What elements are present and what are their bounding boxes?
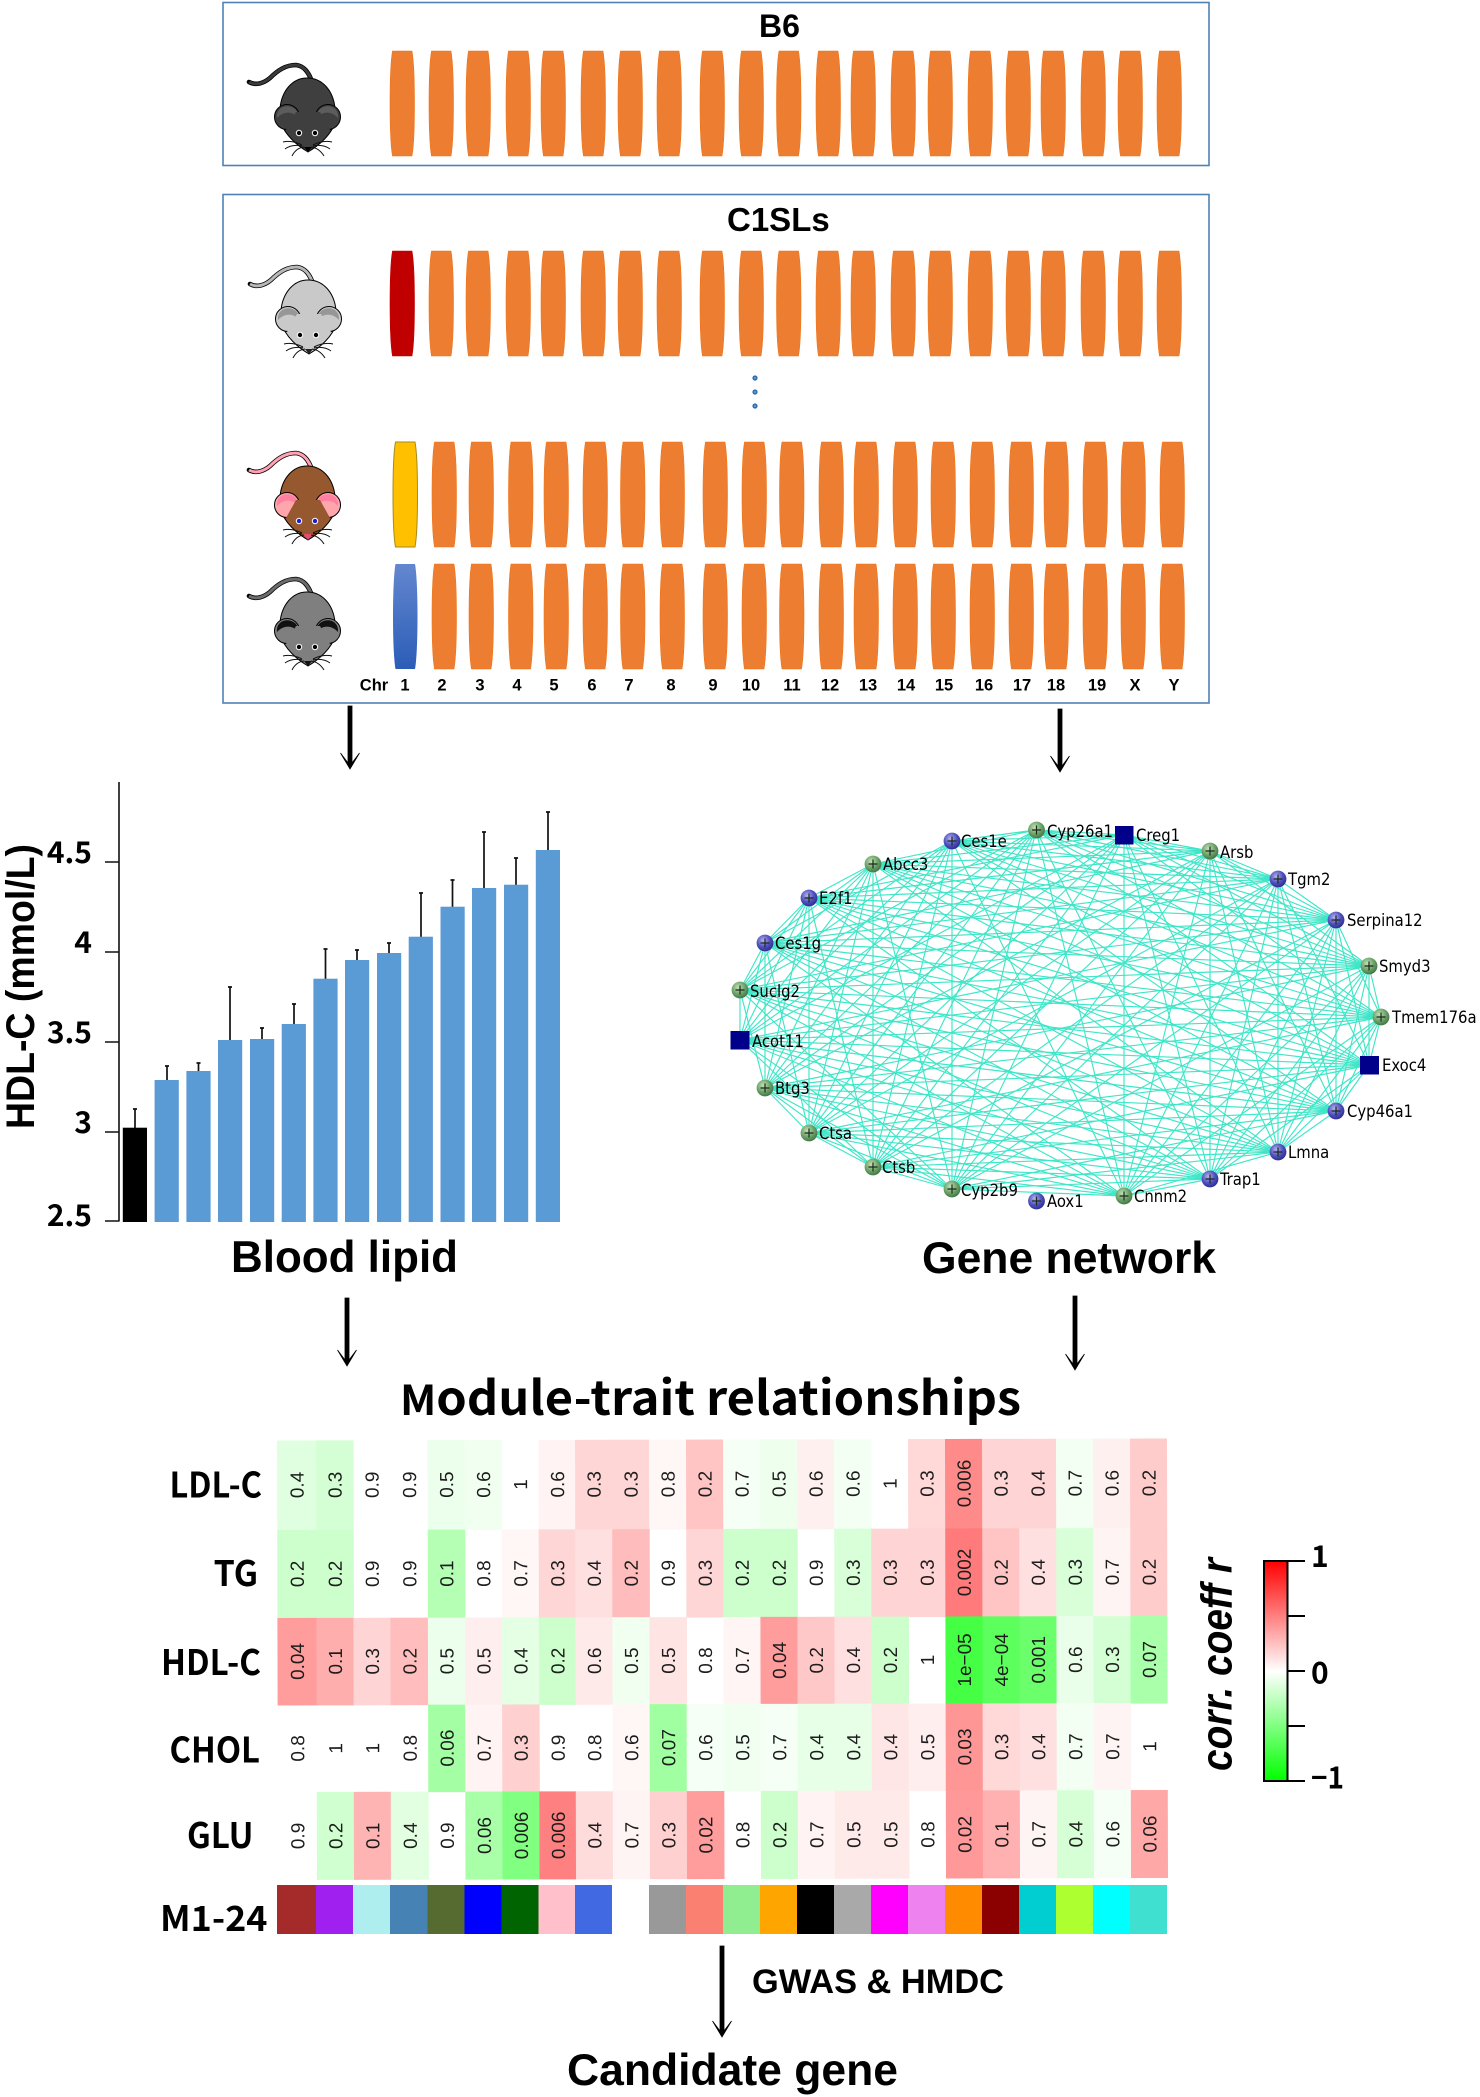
heat row: HDL-C: 0.5 xyxy=(659,1647,680,1674)
heat row: HDL-C: 0.2 xyxy=(548,1648,570,1674)
module colour bar M1-24 xyxy=(277,1885,1167,1934)
heat row: CHOL: 0.06 xyxy=(438,1730,459,1767)
heat row: TG: 0.3 xyxy=(1066,1559,1087,1585)
heat row: CHOL: 0.7 xyxy=(475,1735,496,1761)
heat row: HDL-C: 0.2 xyxy=(881,1647,902,1673)
heat row: GLU: 0.7 xyxy=(807,1822,828,1848)
heat row: TG: 0.9 xyxy=(363,1561,384,1587)
gene labels: Abcc3 xyxy=(883,855,928,874)
heat row: GLU: 0.7 xyxy=(622,1822,643,1848)
heat row: CHOL: 0.7 xyxy=(1066,1733,1087,1760)
heat row: CHOL: 0.3 xyxy=(512,1735,533,1761)
icon: brown mouse xyxy=(249,453,340,544)
heat row: GLU: 0.2 xyxy=(326,1823,347,1849)
chromosome number labels: 12 xyxy=(821,676,839,694)
heat row: GLU: 0.02 xyxy=(955,1816,976,1853)
gene labels: Lmna xyxy=(1288,1143,1329,1162)
heat row: HDL-C: 0.5 xyxy=(622,1647,643,1674)
chromosome number labels: 18 xyxy=(1047,676,1065,694)
heading: Gene network: Gene network xyxy=(922,1234,1216,1283)
chromosome number labels: 4 xyxy=(512,676,522,694)
chromosome number labels: 10 xyxy=(742,676,760,694)
heat row: TG: 0.002 xyxy=(955,1549,976,1596)
heat row: GLU: 0.3 xyxy=(659,1822,680,1848)
heatmap row labels xyxy=(160,1458,268,1942)
heat row: TG: 0.2 xyxy=(326,1561,347,1587)
heat row: TG: 0.9 xyxy=(659,1560,680,1586)
chromosome number labels: 19 xyxy=(1088,676,1106,694)
axis tick labels: 3.5 xyxy=(47,1008,92,1052)
heat row: LDL-C: 0.6 xyxy=(807,1471,828,1497)
heat row: HDL-C: 0.6 xyxy=(1066,1646,1087,1673)
heat row: GLU: 0.8 xyxy=(733,1822,754,1848)
gene labels: Ces1g xyxy=(775,934,821,953)
chromosome number labels: 16 xyxy=(975,676,993,694)
heat row: TG: 0.3 xyxy=(548,1560,569,1587)
heat row: LDL-C: 0.7 xyxy=(1066,1470,1087,1496)
chromosome number labels: 15 xyxy=(935,676,953,694)
heat row: LDL-C: 0.5 xyxy=(770,1471,791,1497)
colour legend: corr. coeff r xyxy=(1192,1532,1344,1798)
heat row: CHOL: 0.8 xyxy=(288,1735,309,1762)
heat row: GLU: 0.7 xyxy=(1029,1821,1050,1848)
chromosome number labels: 8 xyxy=(666,676,676,694)
arrow: genomes to blood lipid xyxy=(340,706,360,769)
heat row: TG: 0.2 xyxy=(733,1560,754,1586)
legend ticks xyxy=(1287,1561,1305,1781)
heat row: CHOL: 0.7 xyxy=(770,1734,791,1761)
heat row: HDL-C: 0.2 xyxy=(400,1648,422,1674)
icon: light grey mouse xyxy=(250,267,342,358)
heat row: TG: 0.7 xyxy=(1103,1559,1124,1585)
chromosome number labels xyxy=(360,676,1180,694)
heat row: HDL-C: 0.5 xyxy=(474,1648,496,1674)
heat row: HDL-C: 0.4 xyxy=(511,1647,533,1674)
heat row: GLU xyxy=(288,1790,1168,1880)
chromosome number labels: 13 xyxy=(859,676,877,694)
heat row: LDL-C: 0.6 xyxy=(548,1471,569,1498)
heading: Candidate gene: Candidate gene xyxy=(567,2046,898,2095)
heat row: TG: 0.9 xyxy=(400,1560,421,1587)
heat row: LDL-C: 1 xyxy=(881,1478,902,1489)
chromosome number labels: 1 xyxy=(400,676,410,694)
heat row: TG xyxy=(277,1528,1167,1618)
axis tick labels: 4.5 xyxy=(47,828,92,872)
network edges xyxy=(740,830,1381,1196)
heat row: GLU: 0.4 xyxy=(1066,1821,1087,1847)
chromosomes: yellow chr1 row xyxy=(393,442,1184,547)
heat row: GLU: 0.1 xyxy=(363,1823,384,1849)
heatmap row labels: HDL-C xyxy=(161,1635,261,1686)
legend title: corr. coeff r xyxy=(1192,1555,1242,1771)
heat row: CHOL: 1 xyxy=(1140,1741,1161,1752)
gene labels: Cyp26a1 xyxy=(1047,822,1113,841)
heading: Blood lipid: Blood lipid xyxy=(231,1233,458,1282)
gene labels: Acot11 xyxy=(752,1032,804,1051)
heat row: HDL-C: 1 xyxy=(918,1655,939,1665)
heat row: LDL-C xyxy=(277,1438,1167,1530)
heat row: GLU: 0.9 xyxy=(438,1822,459,1849)
gene labels: Tmem176a xyxy=(1391,1008,1477,1027)
heat row: CHOL: 0.4 xyxy=(881,1733,902,1760)
heat row: LDL-C: 0.3 xyxy=(585,1471,606,1498)
axis xyxy=(105,782,119,1222)
heat row: CHOL: 0.8 xyxy=(585,1735,606,1761)
axis tick labels: 4 xyxy=(74,918,92,962)
heat row: GLU: 0.5 xyxy=(881,1821,902,1848)
legend gradient bar xyxy=(1264,1561,1288,1781)
gene labels: Serpina12 xyxy=(1347,911,1423,930)
heat row: TG: 0.2 xyxy=(288,1561,309,1587)
heat row: GLU: 0.6 xyxy=(1103,1821,1124,1847)
chromosome number labels: 7 xyxy=(624,676,634,694)
heat row: LDL-C: 0.2 xyxy=(1140,1470,1161,1496)
chromosomes: red chr1 row xyxy=(390,251,1182,356)
heat row: GLU: 0.06 xyxy=(475,1817,496,1854)
heat row: TG: 0.2 xyxy=(622,1560,643,1586)
gene labels: Suclg2 xyxy=(750,982,800,1001)
chromosomes: blue chr1 row xyxy=(393,564,1184,669)
legend labels: 1 xyxy=(1311,1532,1329,1576)
gene labels: Ces1e xyxy=(961,832,1007,851)
heat row: TG: 0.2 xyxy=(992,1559,1013,1586)
heat row: CHOL: 0.03 xyxy=(955,1728,976,1765)
heatmap row labels: GLU xyxy=(187,1808,254,1859)
heat row: CHOL: 0.5 xyxy=(733,1734,754,1761)
heat row: HDL-C: 0.07 xyxy=(1140,1641,1161,1678)
gene labels: Btg3 xyxy=(775,1079,810,1098)
heat row: TG: 0.2 xyxy=(1140,1559,1161,1585)
chromosome number labels: 3 xyxy=(475,676,485,694)
chromosome number labels: Y xyxy=(1168,676,1180,694)
network: gene co-expression xyxy=(730,822,1477,1211)
heading: C1SLs: C1SLs xyxy=(727,201,830,238)
heat row: HDL-C: 4e−04 xyxy=(992,1633,1013,1687)
heat row: CHOL xyxy=(288,1703,1161,1792)
heat row: LDL-C: 0.6 xyxy=(844,1470,865,1497)
heat row: GLU: 0.5 xyxy=(844,1821,865,1848)
chromosome number labels: 6 xyxy=(587,676,597,694)
arrow: gene network to module traits xyxy=(1066,1296,1084,1370)
legend labels: −1 xyxy=(1311,1754,1344,1798)
axis title: HDL-C (mmol/L) xyxy=(0,844,43,1129)
heat row: CHOL: 0.8 xyxy=(401,1735,422,1761)
heat row: CHOL: 0.4 xyxy=(844,1734,865,1760)
heat row: TG: 0.4 xyxy=(1029,1559,1050,1586)
gene labels: Ctsb xyxy=(882,1158,915,1177)
legend labels xyxy=(1311,1532,1344,1798)
heat row: CHOL: 0.5 xyxy=(918,1734,939,1760)
heat row: LDL-C: 0.006 xyxy=(955,1460,976,1507)
heat row: LDL-C: 0.3 xyxy=(326,1472,347,1498)
heat row: GLU: 0.4 xyxy=(585,1822,606,1849)
heat row: HDL-C: 0.04 xyxy=(770,1641,791,1679)
heat row: LDL-C: 0.6 xyxy=(474,1471,495,1498)
chromosome number labels: 14 xyxy=(897,676,916,694)
heading: B6: B6 xyxy=(759,8,800,44)
heat row: CHOL: 0.07 xyxy=(659,1729,680,1766)
heat row: TG: 0.3 xyxy=(844,1559,865,1586)
heat row: HDL-C: 1e−05 xyxy=(955,1633,976,1687)
heat row: HDL-C: 0.7 xyxy=(733,1647,754,1674)
heat row: GLU: 0.1 xyxy=(992,1821,1013,1848)
heat row: TG: 0.3 xyxy=(696,1560,717,1586)
heat row: LDL-C: 1 xyxy=(511,1479,532,1490)
panel: B6 genome xyxy=(223,2,1209,166)
heat row: TG: 0.9 xyxy=(807,1560,828,1586)
panel: C1SLs genomes xyxy=(223,194,1209,703)
heat row: CHOL: 0.7 xyxy=(1103,1733,1124,1760)
heatmap row labels: M1-24 xyxy=(160,1891,268,1942)
heat row: GLU: 0.4 xyxy=(401,1822,422,1849)
heat row: LDL-C: 0.3 xyxy=(992,1470,1013,1497)
heat row: CHOL: 0.4 xyxy=(807,1734,828,1761)
heat row: LDL-C: 0.3 xyxy=(918,1470,939,1497)
heat row: HDL-C: 0.5 xyxy=(437,1648,459,1674)
chromosome number labels: 11 xyxy=(783,676,801,694)
gene labels: Cyp46a1 xyxy=(1347,1102,1413,1121)
chromosome number labels: 5 xyxy=(549,676,559,694)
gene labels: Ctsa xyxy=(819,1124,852,1143)
heat row: LDL-C: 0.4 xyxy=(1029,1470,1050,1497)
heat row: HDL-C: 0.2 xyxy=(807,1647,828,1674)
heat row: LDL-C: 0.4 xyxy=(288,1471,309,1498)
chromosome number labels: X xyxy=(1129,676,1141,694)
heat row: LDL-C: 0.9 xyxy=(400,1471,421,1498)
heat row: HDL-C: 0.04 xyxy=(288,1643,309,1680)
gene labels: Cyp2b9 xyxy=(961,1181,1018,1200)
gene labels: Aox1 xyxy=(1047,1192,1084,1211)
arrow: genomes to gene network xyxy=(1050,709,1070,772)
heat row: LDL-C: 0.5 xyxy=(437,1471,458,1498)
chromosome number labels: Chr xyxy=(360,676,389,694)
heat row: LDL-C: 0.3 xyxy=(622,1471,643,1497)
heat row: LDL-C: 0.8 xyxy=(659,1471,680,1497)
icon: black mouse xyxy=(249,65,340,156)
heat row: HDL-C xyxy=(277,1616,1168,1705)
gene labels: Arsb xyxy=(1220,843,1253,862)
heat row: CHOL: 0.6 xyxy=(622,1734,643,1761)
heat row: LDL-C: 0.9 xyxy=(363,1472,384,1498)
heat row: LDL-C: 0.6 xyxy=(1103,1470,1124,1496)
heat row: HDL-C: 0.001 xyxy=(1029,1636,1050,1684)
axis tick labels xyxy=(47,828,92,1235)
heat row: CHOL: 0.3 xyxy=(992,1734,1013,1760)
heat row: GLU: 0.006 xyxy=(549,1812,570,1859)
heat row: HDL-C: 0.6 xyxy=(585,1648,606,1674)
heat row: TG: 0.2 xyxy=(770,1560,791,1586)
bars xyxy=(123,850,560,1222)
heat row: HDL-C: 0.4 xyxy=(844,1647,865,1673)
heat row: GLU: 0.006 xyxy=(512,1812,533,1859)
legend labels: 0 xyxy=(1311,1648,1329,1692)
heat row: GLU: 0.9 xyxy=(288,1823,309,1849)
heat row: TG: 0.7 xyxy=(511,1560,532,1587)
heatmap row labels: TG xyxy=(214,1546,258,1597)
heat row: GLU: 0.02 xyxy=(696,1817,717,1854)
heading: Module-trait relationships: Module-trait relationships xyxy=(400,1360,1021,1429)
gene labels xyxy=(750,822,1477,1211)
heat row: LDL-C: 0.7 xyxy=(733,1471,754,1497)
heatmap row labels: CHOL xyxy=(170,1722,260,1774)
chromosome number labels: 17 xyxy=(1013,676,1031,694)
gene labels: Trap1 xyxy=(1219,1170,1261,1189)
heat row: TG: 0.1 xyxy=(437,1560,458,1587)
chromosome number labels: 9 xyxy=(708,676,718,694)
gene labels: E2f1 xyxy=(819,889,852,908)
heat row: TG: 0.3 xyxy=(918,1559,939,1586)
gene labels: Cnnm2 xyxy=(1134,1187,1187,1206)
gene labels: Exoc4 xyxy=(1382,1056,1426,1075)
gene labels: Smyd3 xyxy=(1379,957,1431,976)
gene labels: Tgm2 xyxy=(1287,870,1330,889)
heat row: CHOL: 0.6 xyxy=(696,1734,717,1761)
heatmap: module-trait correlations xyxy=(277,1438,1168,1880)
heat row: HDL-C: 0.3 xyxy=(1103,1646,1124,1673)
heat row: GLU: 0.2 xyxy=(770,1822,791,1848)
network nodes xyxy=(730,822,1389,1209)
chromosomes: B6 row xyxy=(390,51,1182,156)
bar chart: HDL-C blood lipid xyxy=(0,782,560,1235)
heat row: TG: 0.8 xyxy=(474,1560,495,1587)
arrow: blood lipid to module traits xyxy=(338,1298,356,1366)
arrow: modules to candidate gene xyxy=(712,1946,732,2037)
text: GWAS & HMDC: GWAS & HMDC xyxy=(752,1963,1004,2001)
heatmap row labels: LDL-C xyxy=(170,1458,262,1508)
heat row: HDL-C: 0.1 xyxy=(326,1648,347,1675)
heat row: HDL-C: 0.8 xyxy=(696,1647,717,1674)
heat row: GLU: 0.8 xyxy=(918,1821,939,1848)
chromosome number labels: 2 xyxy=(437,676,447,694)
heat row: TG: 0.3 xyxy=(881,1559,902,1586)
heat row: LDL-C: 0.2 xyxy=(696,1471,717,1497)
heat row: HDL-C: 0.3 xyxy=(363,1648,384,1675)
ellipsis dots xyxy=(753,376,757,408)
heat row: CHOL: 1 xyxy=(326,1743,347,1754)
error bars xyxy=(133,812,550,1128)
heat row: CHOL: 1 xyxy=(363,1743,384,1754)
axis tick labels: 2.5 xyxy=(47,1191,92,1235)
icon: dark grey mouse xyxy=(249,579,340,670)
heat row: CHOL: 0.9 xyxy=(549,1735,570,1761)
gene labels: Creg1 xyxy=(1136,826,1180,845)
axis tick labels: 3 xyxy=(74,1098,92,1142)
heat row: TG: 0.4 xyxy=(585,1560,606,1587)
heat row: GLU: 0.06 xyxy=(1140,1816,1161,1853)
heat row: CHOL: 0.4 xyxy=(1029,1733,1050,1760)
